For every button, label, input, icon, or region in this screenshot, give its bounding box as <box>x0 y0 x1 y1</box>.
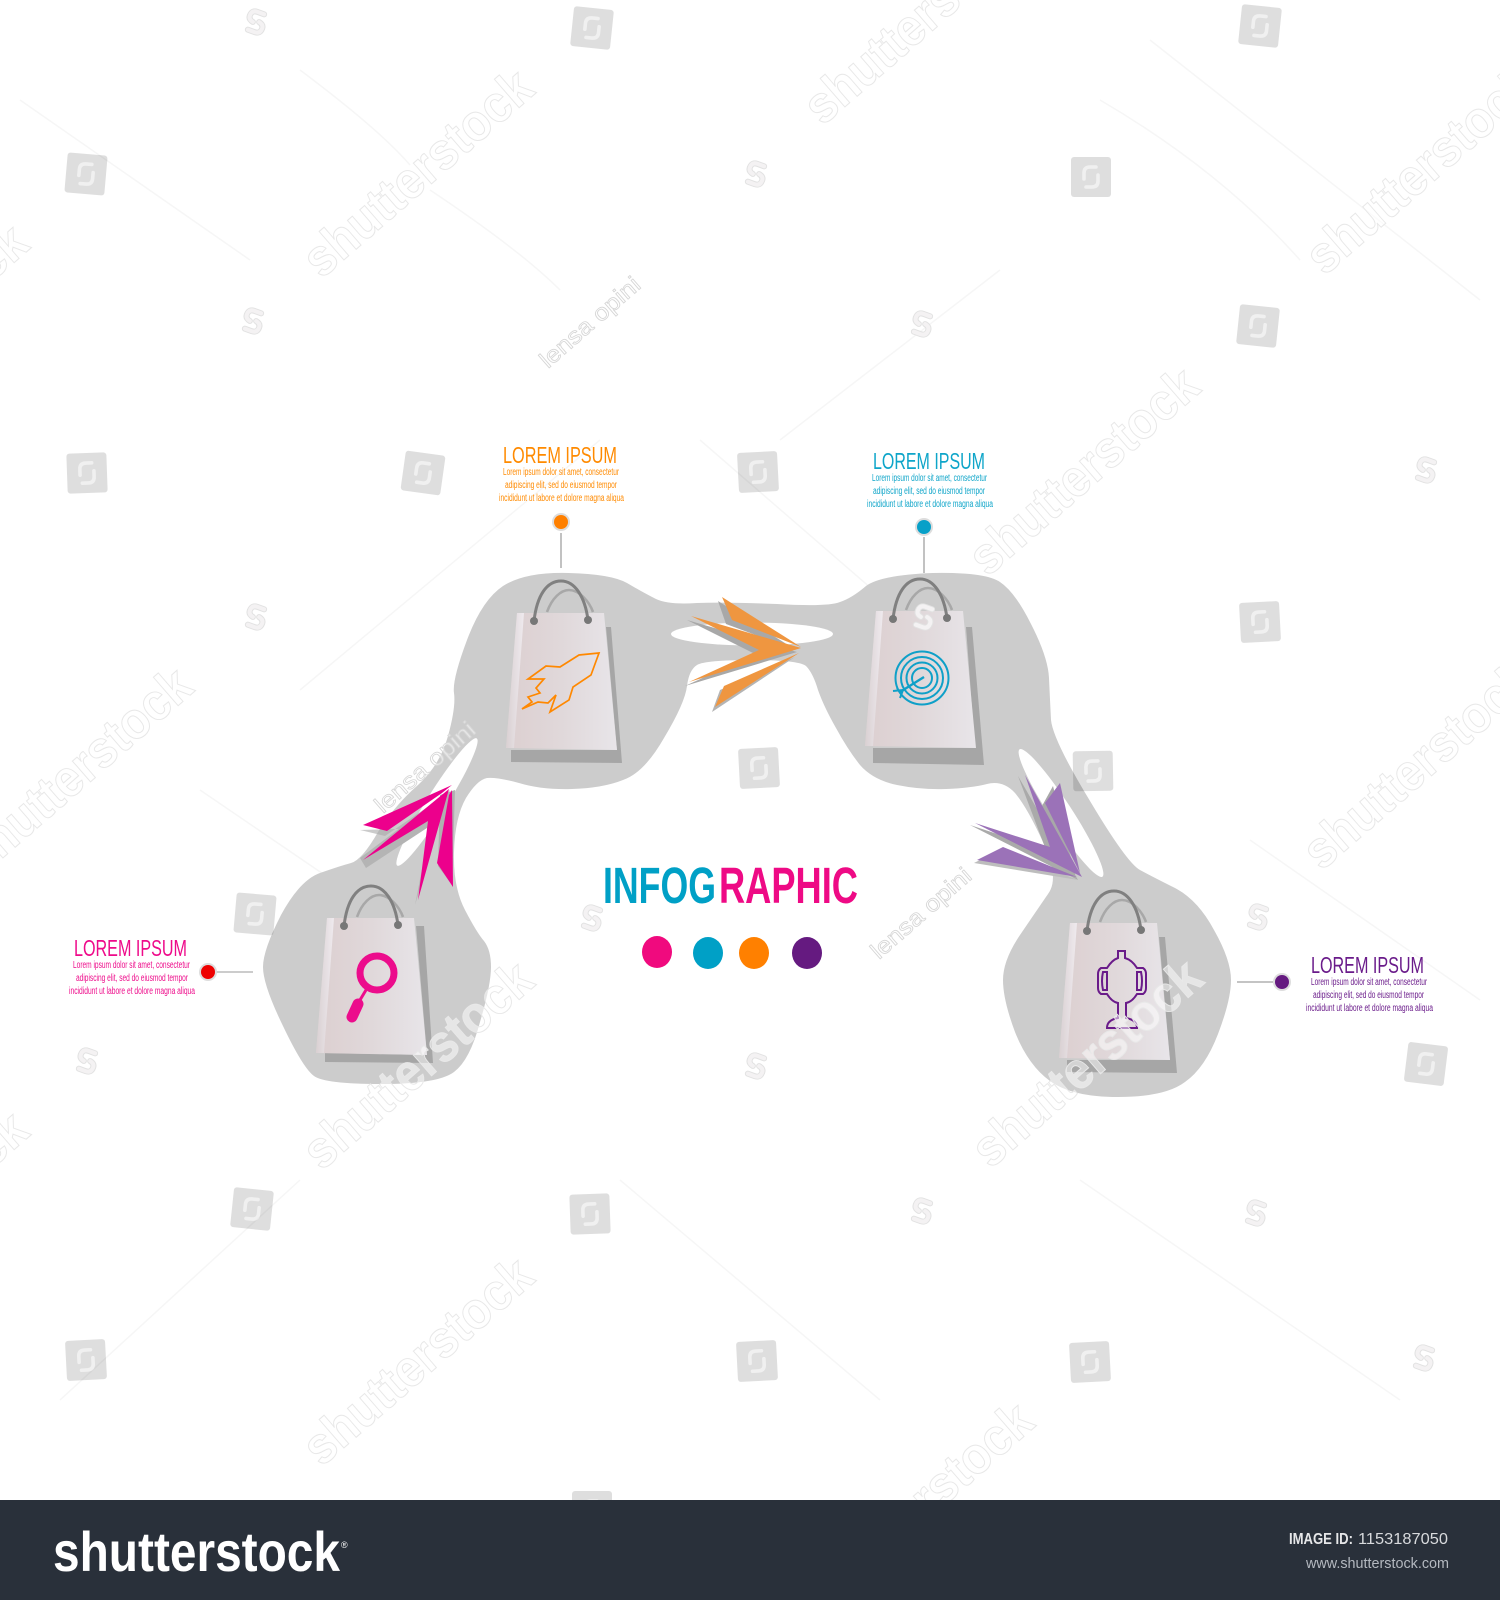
label: blue: Lorem ipsum dolor sit amet, consectetur <box>872 473 987 484</box>
colour dots <box>642 936 822 969</box>
icon: magnifying glass <box>352 956 394 1017</box>
icon: trophy <box>1098 951 1146 1028</box>
label: pink: Lorem ipsum dolor sit amet, consectetur <box>73 960 190 971</box>
label: blue: incididunt ut labore et dolore magna aliqua <box>867 499 993 510</box>
watermark: lensa opini: lensa opini <box>534 271 645 373</box>
connector: blue dot <box>915 518 933 573</box>
label: blue: adipiscing elit, sed do eiusmod tempor <box>873 486 985 497</box>
icon: rocket <box>522 653 599 712</box>
watermark: lensa opini <box>369 271 976 964</box>
watermark: lensa opini: lensa opini <box>369 716 480 818</box>
arrow: orange <box>685 597 801 712</box>
watermark: shutterstock outlines: shutterstock <box>957 356 1210 587</box>
icon: target <box>893 652 948 704</box>
footer bar <box>0 1500 1500 1600</box>
bag 3 with target <box>865 579 984 765</box>
watermark: shutterstock outlines: shutterstock <box>291 1246 544 1477</box>
footer logo: shutterstock <box>53 1520 341 1583</box>
watermark: small swirls <box>76 10 1437 1370</box>
title: INFOGRAPHIC: RAPHIC <box>719 857 858 914</box>
label: blue: LOREM IPSUM <box>873 448 985 474</box>
watermark: lensa opini: lensa opini <box>865 862 976 964</box>
arrow: pink <box>360 785 455 905</box>
registered mark: ® <box>341 1540 348 1550</box>
label: purple: Lorem ipsum dolor sit amet, consectetur <box>1311 977 1427 988</box>
label: purple: adipiscing elit, sed do eiusmod tempor <box>1313 990 1424 1001</box>
label: blue <box>867 448 993 510</box>
label: purple: LOREM IPSUM <box>1311 952 1424 978</box>
bag 1 with magnifier <box>316 886 433 1063</box>
connector: red dot <box>199 963 253 981</box>
connector: orange dot <box>552 513 570 568</box>
label: pink <box>69 935 195 997</box>
label: orange <box>499 442 624 504</box>
label: pink: LOREM IPSUM <box>74 935 187 961</box>
image id: IMAGE ID: <box>1289 1531 1353 1548</box>
label: pink: incididunt ut labore et dolore magna aliqua <box>69 986 195 997</box>
label: purple: incididunt ut labore et dolore magna aliqua <box>1306 1003 1433 1014</box>
connected grey blob path <box>263 573 1231 1097</box>
label: orange: incididunt ut labore et dolore magna aliqua <box>499 493 624 504</box>
connector: purple dot <box>1237 973 1291 991</box>
label: orange: LOREM IPSUM <box>503 442 617 468</box>
label: purple <box>1306 952 1433 1014</box>
bag 4 with trophy <box>1059 891 1177 1073</box>
arrow: purple <box>970 775 1082 880</box>
image id: 1153187050 <box>1358 1531 1448 1548</box>
label: pink: adipiscing elit, sed do eiusmod tempor <box>76 973 188 984</box>
website: www.shutterstock.com <box>1305 1555 1449 1572</box>
bag 2 with rocket <box>506 581 622 763</box>
watermark: shutterstock outlines: shutterstock <box>960 948 1213 1179</box>
title: INFOGRAPHIC: INFOG <box>603 857 716 914</box>
watermark: shutterstock outlines: shutterstock <box>291 950 544 1181</box>
label: orange: adipiscing elit, sed do eiusmod tempor <box>505 480 617 491</box>
watermark: shutterstock outlines: shutterstock <box>291 58 544 289</box>
label: orange: Lorem ipsum dolor sit amet, consectetur <box>503 467 619 478</box>
